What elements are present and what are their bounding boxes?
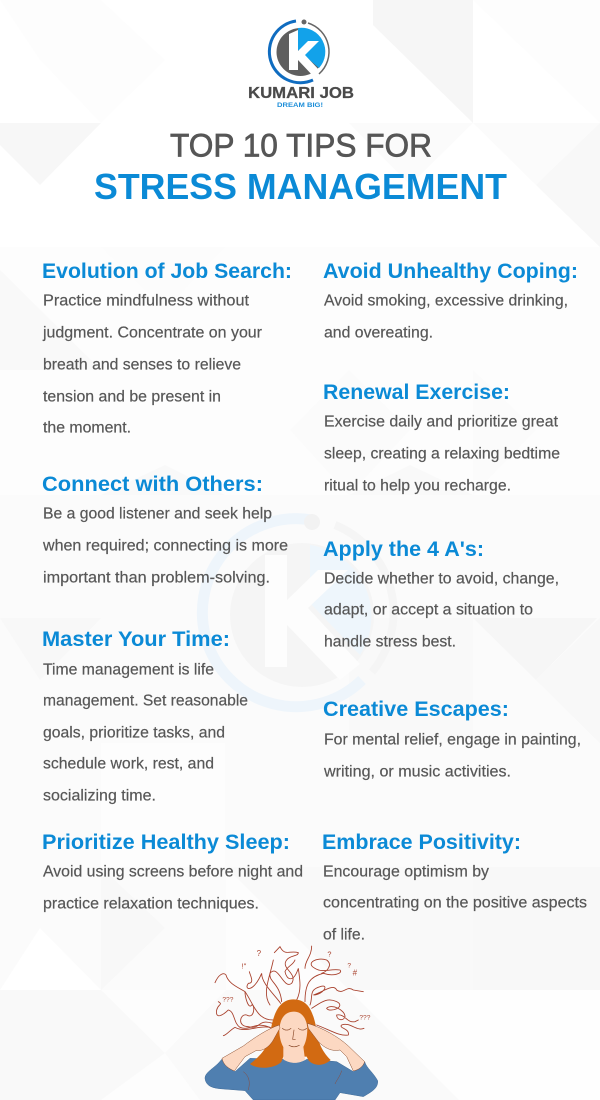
panel: Connect with Others [42, 473, 288, 587]
body text: ritual to help you recharge. [324, 478, 511, 495]
body text: goals, prioritize tasks, and [43, 725, 225, 742]
tagline: DREAM BIG! [277, 103, 323, 109]
question and exclamation marks [222, 949, 371, 1021]
hair [250, 999, 331, 1068]
question and exclamation marks: ? [327, 950, 331, 959]
body text [324, 414, 560, 495]
body text: For mental relief, engage in painting, [324, 732, 581, 749]
tangled thought lines [215, 946, 364, 1036]
question and exclamation marks: ? [347, 962, 351, 969]
body text: handle stress best. [324, 634, 456, 651]
body text [43, 864, 303, 913]
body text: concentrating on the positive aspects [323, 895, 587, 912]
body text: breath and senses to relieve [43, 357, 241, 374]
panel: Evolution of Job Search [42, 260, 292, 437]
body text: and overeating. [324, 325, 433, 342]
question and exclamation marks: ? [257, 949, 262, 958]
shirt [205, 1058, 378, 1100]
body text [42, 506, 288, 587]
body text [323, 864, 587, 944]
panel: Renewal Exercise [323, 381, 560, 495]
panel: Embrace Positivity [322, 831, 587, 944]
question and exclamation marks: ??? [359, 1014, 371, 1021]
body text: Practice mindfulness without [43, 293, 250, 310]
body text: judgment. Concentrate on your [42, 325, 262, 342]
panel: Creative Escapes [323, 698, 581, 781]
body text: the moment. [43, 420, 131, 437]
right arm and hand [307, 1023, 365, 1071]
question and exclamation marks: ??? [222, 997, 234, 1004]
panel: Apply the 4 A's [323, 538, 559, 651]
title line 1: TOP 10 TIPS FOR [170, 128, 432, 164]
logo mark [269, 20, 329, 83]
body text [324, 293, 568, 342]
body text: socializing time. [43, 788, 156, 805]
body text: adapt, or accept a situation to [324, 602, 533, 619]
body text: practice relaxation techniques. [43, 896, 259, 913]
heading: Embrace Positivity: [322, 831, 521, 854]
heading: Avoid Unhealthy Coping: [323, 260, 578, 283]
body text: important than problem-solving. [43, 570, 270, 587]
panel: Prioritize Healthy Sleep [42, 831, 303, 913]
heading: Master Your Time: [42, 628, 230, 651]
body text: Time management is life [43, 662, 214, 679]
body text [323, 732, 581, 781]
body text: schedule work, rest, and [43, 756, 214, 773]
body text: Avoid using screens before night and [43, 864, 303, 881]
heading: Evolution of Job Search: [42, 260, 292, 283]
body text [42, 293, 262, 437]
title line 2: STRESS MANAGEMENT [94, 166, 507, 207]
question and exclamation marks: !" [242, 962, 247, 971]
facial features [282, 1028, 307, 1047]
heading: Apply the 4 A's: [323, 538, 484, 561]
body text: tension and be present in [43, 389, 221, 406]
brand name: KUMARI JOB [248, 85, 354, 102]
heading: Renewal Exercise: [323, 381, 510, 404]
body text: Encourage optimism by [323, 864, 489, 881]
heading: Prioritize Healthy Sleep: [42, 831, 290, 854]
face and neck [279, 1012, 307, 1054]
body text: Exercise daily and prioritize great [324, 414, 559, 431]
shirt folds [243, 1071, 342, 1090]
heading: Connect with Others: [42, 473, 263, 496]
watermark logo [202, 514, 394, 707]
body text: of life. [323, 927, 365, 944]
illustration: stressed woman with tangled thoughts [205, 946, 378, 1100]
logo [248, 20, 354, 109]
body text: Be a good listener and seek help [43, 506, 272, 523]
body text: sleep, creating a relaxing bedtime [324, 446, 560, 463]
body text: Decide whether to avoid, change, [324, 571, 559, 588]
body text: writing, or music activities. [323, 764, 511, 781]
body text: Avoid smoking, excessive drinking, [324, 293, 568, 310]
panel: Avoid Unhealthy Coping [323, 260, 578, 342]
panel: Master Your Time [42, 628, 248, 805]
body text: management. Set reasonable [43, 693, 248, 710]
body text [43, 662, 248, 805]
heading: Creative Escapes: [323, 698, 509, 721]
left arm and hand [222, 1025, 280, 1071]
body text [324, 571, 559, 651]
body text: when required; connecting is more [42, 538, 288, 555]
title [94, 128, 507, 207]
question and exclamation marks: # [353, 968, 358, 977]
